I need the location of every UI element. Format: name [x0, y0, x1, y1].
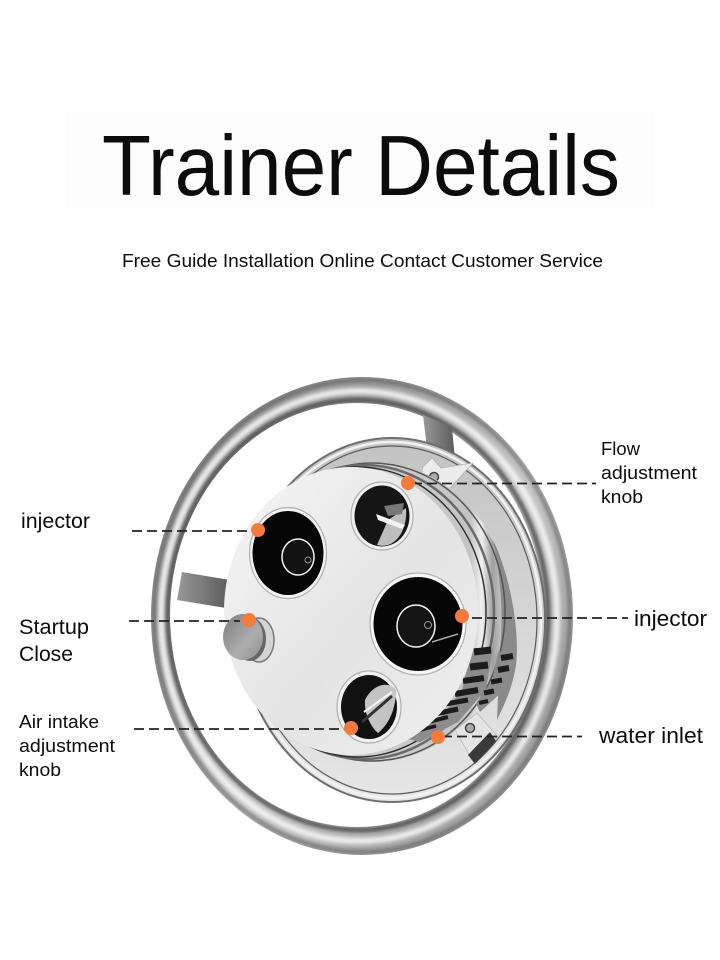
label: air intake adjustment knob: [19, 712, 115, 780]
label: startup close: Startup: [19, 616, 89, 639]
lower bracket with screw and strap: [455, 713, 498, 764]
face plate: [224, 467, 478, 755]
handle ring: [140, 365, 585, 865]
label: water inlet: water inlet: [598, 723, 703, 748]
label: startup close: Close: [19, 643, 73, 666]
injector hole: right: [370, 573, 466, 675]
leader line: flow adjustment knob: [412, 482, 596, 484]
title: Trainer Details: [102, 119, 620, 214]
product illustration: trainer nozzle: [140, 365, 585, 865]
marker: left injector: [251, 523, 265, 537]
marker: startup close: [242, 613, 256, 627]
upper strap: [423, 415, 456, 470]
label: injector left: injector: [21, 510, 90, 533]
label: flow adjustment knob: knob: [601, 487, 643, 507]
label: air intake adjustment knob: Air intake: [19, 712, 99, 732]
air intake hole: bottom: [337, 671, 401, 743]
title backdrop patch: [65, 110, 655, 210]
marker: flow adjustment knob: [401, 476, 415, 490]
leader line: left injector: [132, 530, 258, 532]
top bracket with screw: [420, 458, 473, 488]
subtitle: Free Guide Installation Online Contact Customer Service: [122, 251, 603, 271]
injector hole: upper left: [250, 508, 326, 598]
label: flow adjustment knob: [601, 439, 697, 507]
leader line: water inlet: [442, 736, 582, 738]
leader line: right injector: [472, 617, 628, 619]
small knob hole: top: [351, 482, 413, 550]
leader line: air intake: [134, 728, 348, 730]
marker: air intake: [344, 721, 358, 735]
marker: water inlet: [431, 730, 445, 744]
label: air intake adjustment knob: adjustment: [19, 736, 115, 756]
label: injector right: injector: [634, 606, 707, 631]
startup button: [223, 614, 274, 662]
label: flow adjustment knob: adjustment: [601, 463, 697, 483]
label: air intake adjustment knob: knob: [19, 760, 61, 780]
cylinder side wall: [230, 462, 517, 762]
label: flow adjustment knob: Flow: [601, 439, 641, 459]
vent slats: [404, 648, 515, 742]
infographic canvas: [19, 133, 707, 855]
label: startup close: [19, 616, 89, 666]
housing body: [239, 438, 545, 802]
leader line: startup close: [129, 620, 240, 622]
left strap: [177, 572, 230, 608]
marker: right injector: [455, 609, 469, 623]
